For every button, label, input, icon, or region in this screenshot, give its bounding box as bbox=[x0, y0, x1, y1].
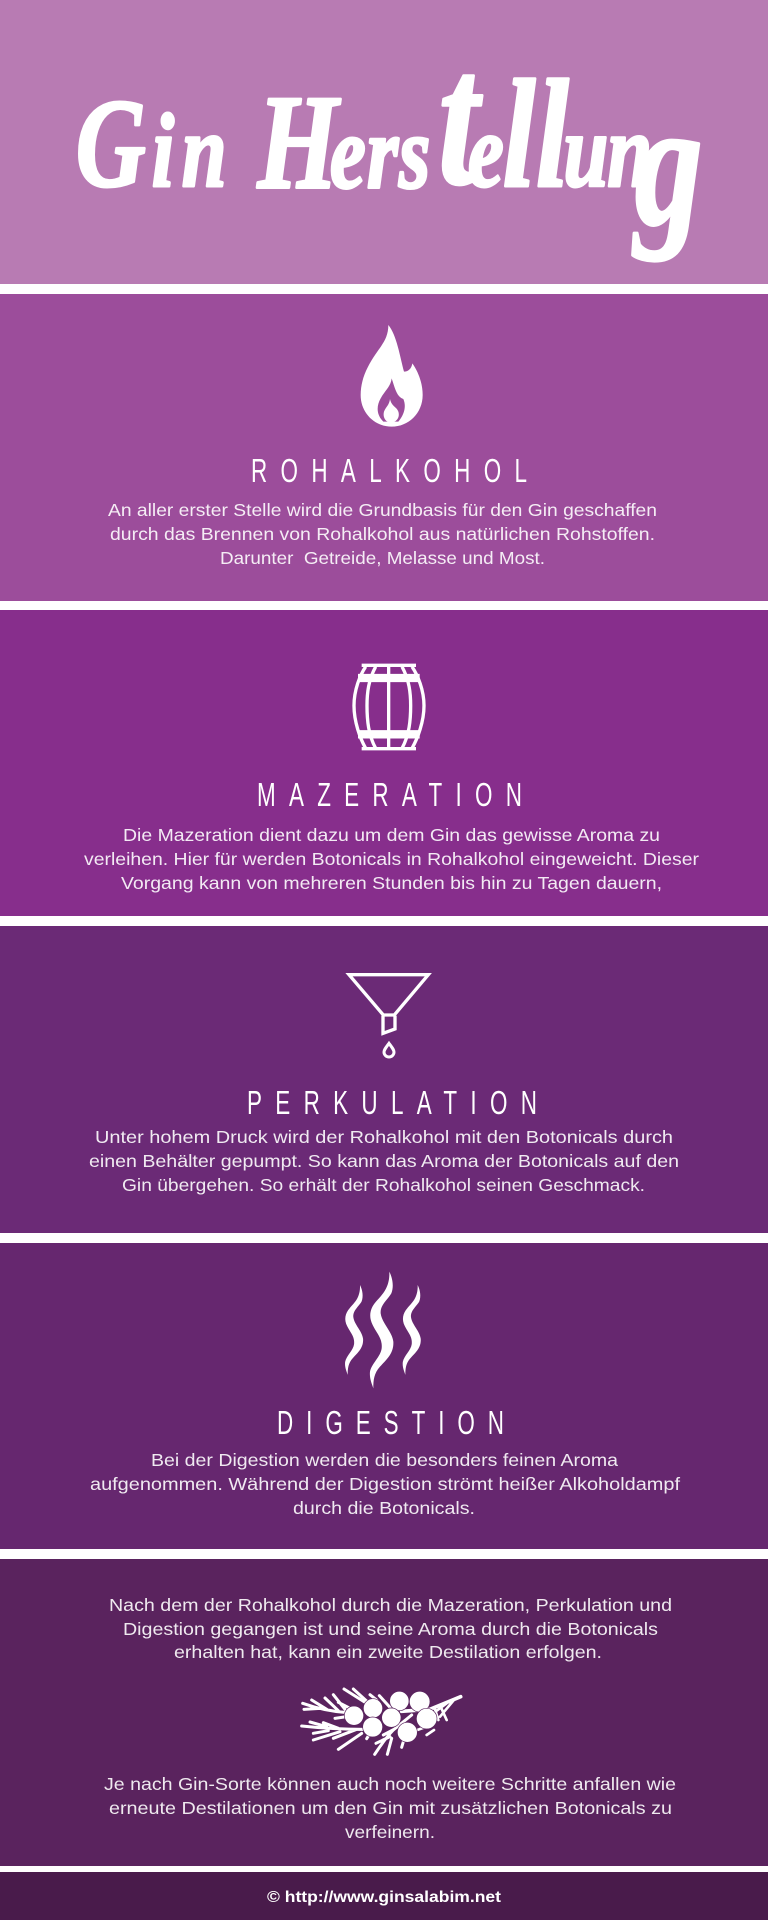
text block: second distillation: erhalten hat, kann ein zweite Destilation erfolgen. bbox=[174, 1642, 602, 1662]
icon: juniper branch bbox=[302, 1689, 461, 1754]
panel: Rohalkohol bbox=[0, 294, 768, 601]
text block: Rohalkohol: durch das Brennen von Rohalkohol aus natürlichen Rohstoffen. bbox=[110, 524, 655, 544]
text block: Perkulation bbox=[89, 1127, 679, 1195]
heading: Mazeration: MAZERATION bbox=[257, 776, 522, 813]
text block: Digestion: Bei der Digestion werden die besonders feinen Aroma bbox=[151, 1450, 618, 1470]
panel: Digestion bbox=[0, 1243, 768, 1549]
title: n bbox=[182, 94, 226, 210]
heading: Rohalkohol: ROHALKOHOL bbox=[251, 452, 527, 489]
panel: footer bbox=[0, 1872, 768, 1920]
text block: second distillation: Digestion gegangen ist und seine Aroma durch die Botonicals bbox=[123, 1619, 658, 1639]
panel: summary bbox=[0, 1559, 768, 1866]
text block: Perkulation: Unter hohem Druck wird der Rohalkohol mit den Botonicals durch bbox=[95, 1127, 673, 1147]
text block: Rohalkohol: An aller erster Stelle wird die Grundbasis für den Gin geschaffen bbox=[108, 500, 657, 520]
title: t bbox=[438, 14, 483, 225]
text block: Mazeration: Vorgang kann von mehreren Stunden bis hin zu Tagen dauern, bbox=[121, 873, 662, 893]
text block: Digestion: aufgenommen. Während der Digestion strömt heißer Alkoholdampf bbox=[90, 1474, 680, 1494]
text block: Perkulation: einen Behälter gepumpt. So kann das Aroma der Botonicals auf den bbox=[89, 1151, 679, 1171]
text block: Digestion: durch die Botonicals. bbox=[293, 1498, 475, 1518]
panel: Mazeration bbox=[0, 610, 768, 916]
text block: Rohalkohol bbox=[108, 500, 657, 568]
icon: flame bbox=[361, 325, 423, 427]
title: i bbox=[152, 94, 174, 210]
title: l bbox=[503, 48, 536, 220]
icon: funnel with drop bbox=[349, 975, 428, 1057]
text block: Mazeration: verleihen. Hier für werden Botonicals in Rohalkohol eingeweicht. Dieser bbox=[84, 849, 699, 869]
heading: Perkulation: PERKULATION bbox=[247, 1084, 537, 1121]
panel: header bbox=[0, 0, 768, 284]
text block: further steps: erneute Destilationen um den Gin mit zusätzlichen Botonicals zu bbox=[109, 1798, 672, 1818]
title: l bbox=[536, 48, 569, 220]
footer link text: © http://www.ginsalabim.net bbox=[267, 1889, 502, 1906]
text block: Perkulation: Gin übergehen. So erhält der Rohalkohol seinen Geschmack. bbox=[122, 1175, 645, 1195]
text block: further steps bbox=[104, 1774, 676, 1842]
title: u bbox=[563, 94, 608, 210]
text block: Digestion bbox=[90, 1450, 680, 1518]
text block: Rohalkohol: Darunter Getreide, Melasse und Most. bbox=[220, 548, 545, 568]
text block: further steps: verfeinern. bbox=[345, 1822, 435, 1842]
icon: steam bbox=[345, 1272, 421, 1388]
title: g bbox=[632, 66, 703, 263]
icon: barrel bbox=[354, 665, 424, 749]
title: n bbox=[607, 94, 652, 210]
text block: Mazeration bbox=[84, 825, 699, 893]
title: e bbox=[330, 95, 366, 211]
text block: further steps: Je nach Gin-Sorte können auch noch weitere Schritte anfallen wie bbox=[104, 1774, 676, 1794]
title: H bbox=[257, 69, 341, 218]
heading: Digestion: DIGESTION bbox=[277, 1404, 504, 1441]
title: G bbox=[76, 75, 146, 214]
panel: Perkulation bbox=[0, 926, 768, 1233]
text block: Mazeration: Die Mazeration dient dazu um dem Gin das gewisse Aroma zu bbox=[123, 825, 660, 845]
text block: second distillation: Nach dem der Rohalkohol durch die Mazeration, Perkulation und bbox=[109, 1595, 672, 1615]
title: e bbox=[468, 94, 504, 210]
text block: second distillation bbox=[109, 1595, 672, 1662]
title: r bbox=[367, 95, 400, 211]
title: s bbox=[398, 95, 430, 211]
